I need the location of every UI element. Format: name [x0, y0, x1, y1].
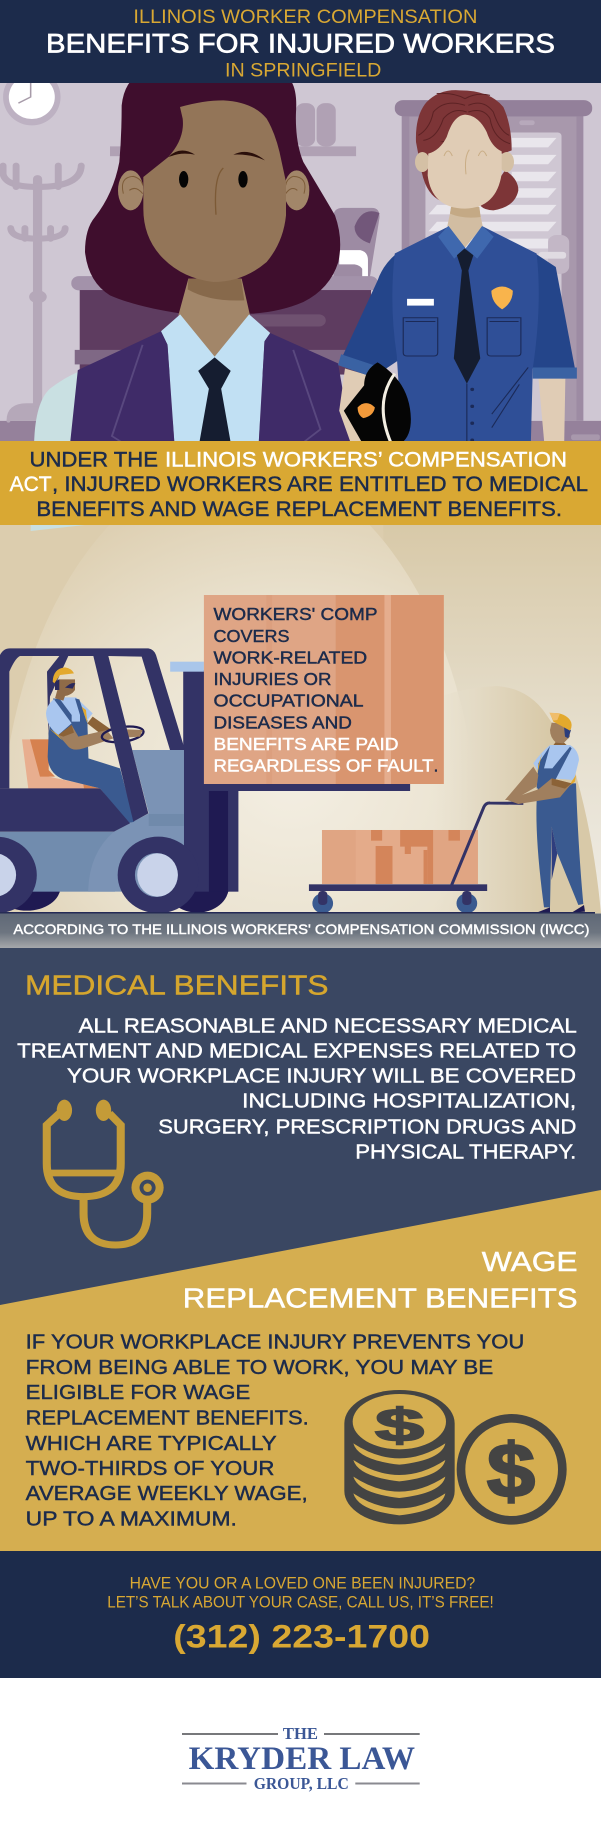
near arm: [507, 778, 572, 804]
panel: call to action: [0, 1551, 601, 1678]
wage paragraph: ELIGIBLE FOR WAGE: [26, 1382, 250, 1404]
ground line: [0, 912, 595, 914]
scene background: [0, 525, 601, 915]
desk with monitor: [71, 208, 380, 375]
name tag: [407, 299, 434, 306]
gold statement band: [0, 441, 601, 525]
wage heading: WAGE: [482, 1246, 578, 1277]
statement line 2 white: ACT: [10, 472, 52, 496]
officer head: [415, 90, 518, 248]
eyes: [179, 171, 188, 188]
medical paragraph: TREATMENT AND MEDICAL EXPENSES RELATED TO: [17, 1041, 576, 1063]
slice of chair above: [31, 525, 88, 531]
engine cover: [88, 750, 184, 892]
medical paragraph: INCLUDING HOSPITALIZATION,: [242, 1091, 576, 1113]
right arm: [539, 379, 565, 443]
uniform shirt: [392, 226, 539, 443]
head: [55, 679, 75, 701]
head: [550, 723, 570, 743]
left arm: [339, 368, 374, 443]
illustration: warehouse forklift scene: [0, 525, 601, 914]
boxes on cart: [322, 830, 478, 884]
wage paragraph: [26, 1331, 524, 1531]
panel: wage replacement benefits: REPLACEMENT BENEFITS: [183, 1282, 578, 1313]
cart handle: [452, 803, 523, 885]
text on cargo box: WORKERS' COMP: [214, 604, 378, 624]
text on cargo box: COVERS: [214, 626, 290, 646]
statement line 2 dark: , INJURED WORKERS ARE ENTITLED TO MEDICAL: [52, 472, 588, 496]
bib: [537, 746, 572, 788]
office wall: [0, 83, 601, 443]
logo: The Kryder Law Group: THE: [283, 1724, 318, 1743]
icon: wall clock: [3, 69, 61, 125]
mast: [183, 670, 209, 892]
icon: stethoscope: [47, 1100, 164, 1245]
cab pillar: [47, 656, 68, 737]
nose: [215, 168, 223, 215]
fork: [204, 784, 410, 791]
text on cargo box: [214, 604, 438, 776]
overalls: [48, 698, 134, 823]
logo: The Kryder Law Group: GROUP, LLC: [254, 1774, 349, 1793]
logo: The Kryder Law Group: KRYDER LAW: [189, 1741, 415, 1777]
shirt: [46, 697, 93, 735]
phone number: (312) 223-1700: [173, 1618, 430, 1654]
right side backdrop: [383, 525, 601, 915]
coat rack: [3, 166, 81, 421]
statement line 1 dark: UNDER THE: [30, 448, 158, 472]
shelf with bottles: [110, 103, 356, 156]
driver seat: [22, 739, 100, 789]
wage paragraph: AVERAGE WEEKLY WAGE,: [26, 1483, 308, 1505]
blazer: [70, 331, 352, 443]
wheels: [0, 837, 199, 913]
icon: coin stack and coin: [344, 1390, 562, 1524]
far arm: [505, 767, 538, 800]
text on cargo box: OCCUPATIONAL: [214, 690, 364, 710]
ears: [118, 170, 309, 210]
face: [428, 115, 502, 209]
illustration: office with two workers: [0, 69, 601, 443]
woman head: [85, 82, 340, 360]
large dome: [8, 525, 460, 912]
worker shirt: [533, 745, 579, 780]
shoes: [537, 905, 585, 913]
medical paragraph: PHYSICAL THERAPY.: [355, 1142, 576, 1164]
text on cargo box: REGARDLESS OF FAULT: [214, 756, 434, 776]
face: [143, 100, 286, 282]
source citation strip: [0, 914, 601, 948]
police officer: [338, 90, 577, 443]
header line 1: ILLINOIS WORKER COMPENSATION: [133, 6, 477, 28]
panel: medical benefits: [0, 948, 601, 1308]
wage paragraph: UP TO A MAXIMUM.: [26, 1509, 237, 1531]
ears: [415, 152, 514, 172]
medical heading: MEDICAL BENEFITS: [25, 969, 328, 1000]
main title: BENEFITS FOR INJURED WORKERS: [46, 28, 555, 58]
text on cargo box: DISEASES AND: [214, 712, 352, 732]
collar: [438, 226, 494, 259]
statement line 3: BENEFITS AND WAGE REPLACEMENT BENEFITS.: [36, 497, 562, 521]
left sleeve: [339, 252, 406, 377]
neck: [552, 742, 569, 747]
door with blinds: [395, 100, 600, 440]
warehouse worker pushing cart: [452, 713, 585, 913]
back wheel shadow: [0, 863, 61, 911]
tie: [198, 357, 231, 443]
text on cargo box: .: [434, 756, 438, 776]
text on cargo box: WORK-RELATED: [214, 647, 367, 667]
right sleeve: [529, 252, 575, 368]
shirt: [161, 314, 270, 443]
bib: [48, 698, 88, 758]
wage paragraph: FROM BEING ABLE TO WORK, YOU MAY BE: [26, 1357, 493, 1379]
police hat: [344, 362, 411, 443]
wage paragraph: IF YOUR WORKPLACE INJURY PREVENTS YOU: [26, 1331, 524, 1353]
pockets: [403, 318, 528, 443]
logo: The Kryder Law Group: [182, 1724, 420, 1793]
woman in blazer: [70, 82, 352, 443]
text on cargo box: BENEFITS ARE PAID: [214, 734, 398, 754]
forklift: [0, 662, 410, 913]
hair bun: [481, 170, 518, 210]
driver: [46, 667, 144, 823]
tie: [454, 248, 480, 384]
cta line 1: HAVE YOU OR A LOVED ONE BEEN INJURED?: [130, 1574, 475, 1593]
hair: [416, 90, 512, 201]
cta line 2: LET’S TALK ABOUT YOUR CASE, CALL US, IT’S FREE!: [107, 1592, 494, 1611]
medical paragraph: YOUR WORKPLACE INJURY WILL BE COVERED: [67, 1066, 576, 1088]
wage paragraph: REPLACEMENT BENEFITS.: [26, 1408, 309, 1430]
cab frame: [0, 648, 185, 822]
forklift cab and driver: [0, 648, 185, 832]
buttons: [470, 388, 474, 442]
chair back: [34, 370, 82, 443]
small dollar sign: $: [375, 1399, 424, 1451]
right dome: [422, 686, 601, 913]
floor: [0, 421, 601, 443]
worker legs: [536, 783, 583, 907]
badge: [491, 286, 513, 309]
header banner: [0, 0, 601, 83]
text on cargo box: INJURIES OR: [214, 669, 332, 689]
medical paragraph: ALL REASONABLE AND NECESSARY MEDICAL: [79, 1016, 577, 1038]
cargo box: [204, 595, 444, 784]
hair: [85, 82, 340, 314]
brows: [168, 151, 265, 160]
lower body: [0, 832, 115, 892]
panel: wage replacement benefits: [0, 1190, 601, 1551]
large dollar sign: $: [487, 1429, 535, 1514]
steering wheel: [101, 724, 144, 745]
hand cart: [309, 884, 487, 913]
medical paragraph: [17, 1016, 577, 1164]
cuffs: [338, 354, 577, 379]
wage paragraph: TWO-THIRDS OF YOUR: [26, 1458, 274, 1480]
far arm: [87, 717, 112, 733]
near arm: [58, 725, 113, 750]
neck: [178, 279, 250, 360]
cab body: [0, 788, 130, 832]
statement line 1 white: ILLINOIS WORKERS’ COMPENSATION: [165, 448, 567, 472]
neck: [447, 205, 483, 248]
medical paragraph: SURGERY, PRESCRIPTION DRUGS AND: [158, 1116, 576, 1138]
citation text: ACCORDING TO THE ILLINOIS WORKERS' COMPENSATION COMMISSION (IWCC): [13, 921, 589, 937]
header line 3: IN SPRINGFIELD: [225, 59, 381, 81]
wage paragraph: WHICH ARE TYPICALLY: [26, 1433, 277, 1455]
